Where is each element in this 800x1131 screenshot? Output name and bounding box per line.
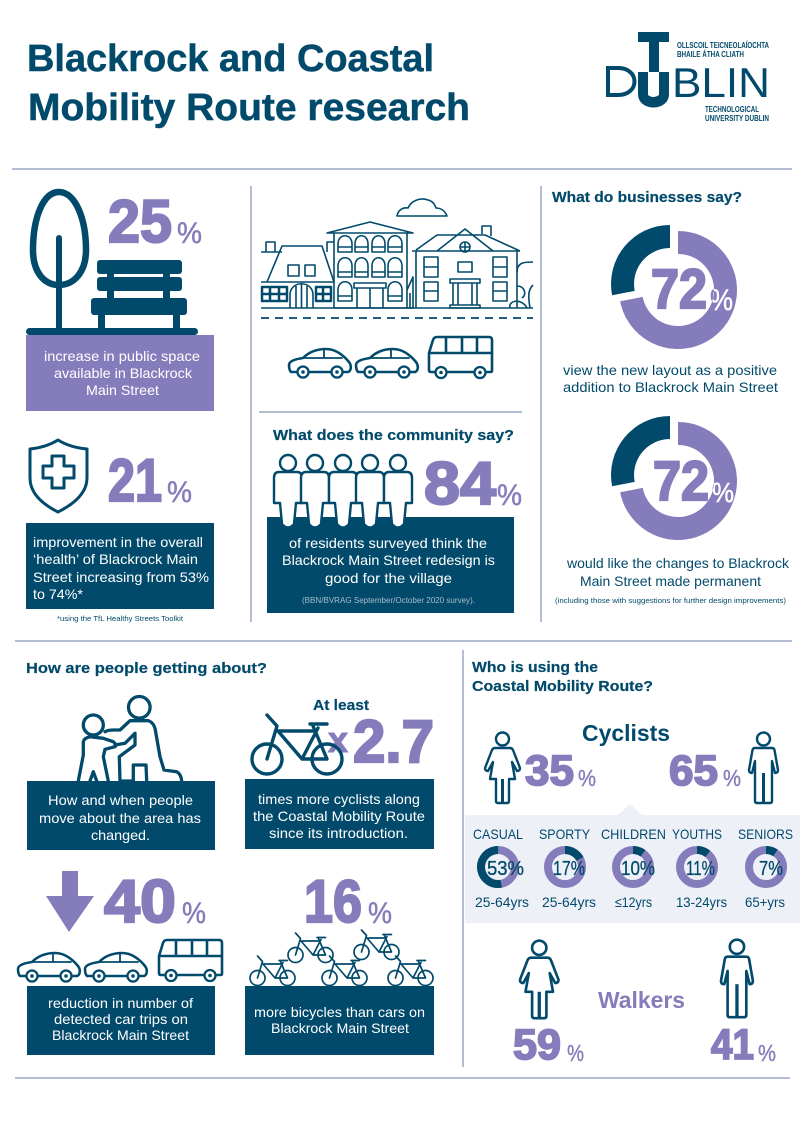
- heading: community: What does the community say?: [273, 427, 514, 444]
- number: 84%: [424, 450, 522, 517]
- category: casual: 53%: [487, 858, 524, 880]
- panel: getting about: [18, 660, 434, 1055]
- box: how and when text: move about the area has: [39, 810, 201, 826]
- category: casual: [473, 826, 529, 910]
- category: sporty: SPORTY: [539, 826, 591, 842]
- footnote: *using the TfL Healthy Streets Toolkit: [57, 614, 184, 623]
- number: 59%: [513, 1021, 584, 1069]
- stat: how and when: [27, 696, 215, 850]
- category: youths: [672, 826, 727, 910]
- donut chart: 72% positive: [611, 225, 737, 349]
- text: made permanent: [555, 555, 790, 605]
- panel: cyclist categories: [465, 804, 800, 923]
- icon: down arrow: [46, 871, 94, 932]
- heading: businesses: What do businesses say?: [552, 189, 742, 206]
- number: 21%: %: [167, 476, 192, 509]
- heading: who is using: [472, 659, 653, 695]
- category: seniors: 65+yrs: [745, 894, 785, 910]
- category: seniors: [738, 826, 793, 910]
- box: community text: good for the village: [325, 570, 452, 586]
- logo: TU Dublin: [608, 32, 770, 123]
- donut chart: 72% permanent: 72: [653, 449, 709, 512]
- box: cyclists text: [245, 779, 434, 849]
- box: cyclists text: the Coastal Mobility Route: [253, 808, 425, 824]
- category: children: CHILDREN: [601, 826, 666, 842]
- box: reduction text: [27, 986, 215, 1055]
- icon: five people: [274, 455, 412, 528]
- road dashes: [261, 317, 533, 319]
- icon: shield with cross: [30, 440, 87, 512]
- box: bicycles text: more bicycles than cars on: [254, 1004, 425, 1020]
- box: reduction text: Blackrock Main Street: [52, 1027, 189, 1043]
- box: community text: Blackrock Main Street redesign is: [282, 552, 495, 568]
- heading: walkers: Walkers: [598, 987, 685, 1013]
- number: 40%: [104, 868, 206, 935]
- title: Blackrock and Coastal: [27, 38, 434, 80]
- category: youths: 13-24yrs: [676, 894, 727, 910]
- logo: TU Dublin: BLIN: [672, 59, 770, 106]
- donut chart: 72% positive: %: [710, 284, 733, 317]
- text: made permanent: (including those with suggestions for further design improvements): [555, 596, 787, 605]
- number: 59%: %: [567, 1040, 584, 1066]
- category: sporty: 25-64yrs: [542, 894, 596, 910]
- illustration: street scene: [261, 199, 533, 378]
- number: 40%: %: [182, 897, 206, 930]
- title: [27, 38, 470, 129]
- icon: adult and child: [78, 696, 182, 781]
- number: 35%: %: [578, 765, 596, 791]
- donut chart: 72% permanent: [611, 416, 737, 540]
- box: cyclists text: times more cyclists along: [258, 791, 420, 807]
- icon: man cyclist: [749, 732, 778, 803]
- number: 16%: 16: [304, 868, 362, 935]
- category: casual: CASUAL: [473, 826, 523, 842]
- box: how and when text: How and when people: [48, 792, 193, 808]
- number: 25%: %: [177, 217, 202, 250]
- category: casual: 25-64yrs: [475, 894, 529, 910]
- text: made permanent: would like the changes to Blackrock: [566, 555, 790, 571]
- icon: bus: [429, 337, 492, 378]
- stat: 16% more bicycles: [245, 868, 434, 1055]
- text: positive addition: addition to Blackrock Main Street: [563, 379, 778, 395]
- category: seniors: 7%: [759, 858, 783, 880]
- category: children: 10%: [621, 858, 655, 880]
- number: 84%: %: [497, 479, 522, 512]
- logo: TU Dublin: TECHNOLOGICAL: [705, 105, 759, 114]
- text: made permanent: Main Street made permanent: [580, 573, 761, 589]
- number: 25%: 25: [108, 188, 172, 255]
- category: sporty: [539, 826, 596, 910]
- number: 16%: %: [368, 897, 392, 930]
- category: youths: YOUTHS: [672, 826, 722, 842]
- icon: man walker: [721, 940, 753, 1017]
- icon: bicycle: [252, 715, 342, 774]
- box: public space text: Main Street: [86, 382, 159, 398]
- title: Mobility Route research: [28, 87, 470, 129]
- donut chart: 72% permanent: %: [712, 477, 734, 508]
- logo: TU Dublin: UNIVERSITY DUBLIN: [705, 114, 769, 123]
- box: how and when text: changed.: [91, 827, 150, 843]
- box: reduction text: reduction in number of: [48, 995, 193, 1011]
- heading: who is using: Coastal Mobility Route?: [472, 678, 653, 695]
- box: health text: to 74%*: [33, 586, 84, 602]
- category: children: ≤12yrs: [615, 894, 652, 910]
- panel: businesses: [552, 189, 790, 605]
- text: positive addition: [563, 362, 778, 395]
- text: at least: At least: [313, 697, 369, 714]
- icon: bus: [159, 940, 222, 981]
- category: seniors: SENIORS: [738, 826, 793, 842]
- box: public space text: [26, 335, 214, 411]
- number: 35%: [525, 747, 596, 795]
- icon: car: [85, 953, 147, 982]
- box: public space text: available in Blackrock: [54, 365, 193, 381]
- box: community text: [267, 517, 514, 613]
- number: 65%: 65: [669, 747, 718, 795]
- number: x2.7: x: [328, 719, 348, 760]
- stat: 2.7 times more cyclists: [245, 697, 434, 849]
- panel: who is using the route: [465, 659, 800, 1069]
- icon: car: [356, 349, 418, 378]
- stat: 40% reduction: [18, 868, 222, 1055]
- text: positive addition: view the new layout as a positive: [563, 362, 777, 378]
- number: 65%: [669, 747, 741, 795]
- box: health text: [26, 523, 214, 609]
- box: health text: ‘health’ of Blackrock Main: [33, 551, 198, 567]
- category: youths: 11%: [686, 858, 715, 880]
- icon: group of bicycles: [250, 930, 433, 986]
- box: bicycles text: [245, 986, 434, 1055]
- number: 65%: %: [723, 765, 741, 791]
- box: bicycles text: Blackrock Main Street: [271, 1020, 409, 1036]
- icon: cloud: [397, 199, 447, 216]
- number: x2.7: 2.7: [353, 708, 434, 775]
- box: health text: Street increasing from 53%: [33, 569, 209, 585]
- box: reduction text: detected car trips on: [54, 1011, 188, 1027]
- icon: tree and bench: [26, 192, 198, 335]
- stat panel: 21% health: [26, 440, 214, 623]
- box: public space text: increase in public space: [44, 348, 200, 364]
- donut chart: 72% permanent: %: [712, 477, 734, 508]
- number: 35%: 35: [525, 747, 574, 795]
- box: how and when text: [27, 781, 215, 850]
- number: 40%: 40: [104, 868, 176, 935]
- icon: car: [289, 349, 351, 378]
- number: 21%: 21: [108, 447, 162, 514]
- box: community text: (BBN/BVRAG September/October 2020 survey).: [302, 596, 475, 605]
- donut chart: 72% positive: 72: [651, 257, 707, 320]
- donut chart: 72% positive: %: [710, 284, 733, 317]
- icon: woman walker: [520, 941, 558, 1018]
- box: cyclists text: since its introduction.: [269, 825, 408, 841]
- logo: TU Dublin: BHAILE ÁTHA CLIATH: [677, 50, 744, 59]
- box: community text: of residents surveyed think the: [289, 535, 487, 551]
- heading: getting about: How are people getting about?: [26, 660, 267, 677]
- logo: TU Dublin: OLLSCOIL TEICNEOLAÍOCHTA: [677, 41, 769, 50]
- heading: who is using: Who is using the: [472, 659, 598, 676]
- panel: community: [267, 427, 522, 613]
- icon: woman cyclist: [485, 732, 520, 803]
- number: 84%: 84: [424, 450, 497, 517]
- heading: cyclists: Cyclists: [582, 720, 670, 746]
- number: 59%: 59: [513, 1021, 561, 1069]
- number: 41%: 41: [711, 1021, 754, 1069]
- icon: buildings: [261, 222, 533, 308]
- number: 41%: %: [758, 1040, 776, 1066]
- category: sporty: 17%: [553, 858, 585, 880]
- box: health text: improvement in the overall: [33, 534, 203, 550]
- category: children: [601, 826, 666, 910]
- icon: car: [18, 953, 80, 982]
- stat panel: 25% public space: [26, 188, 214, 411]
